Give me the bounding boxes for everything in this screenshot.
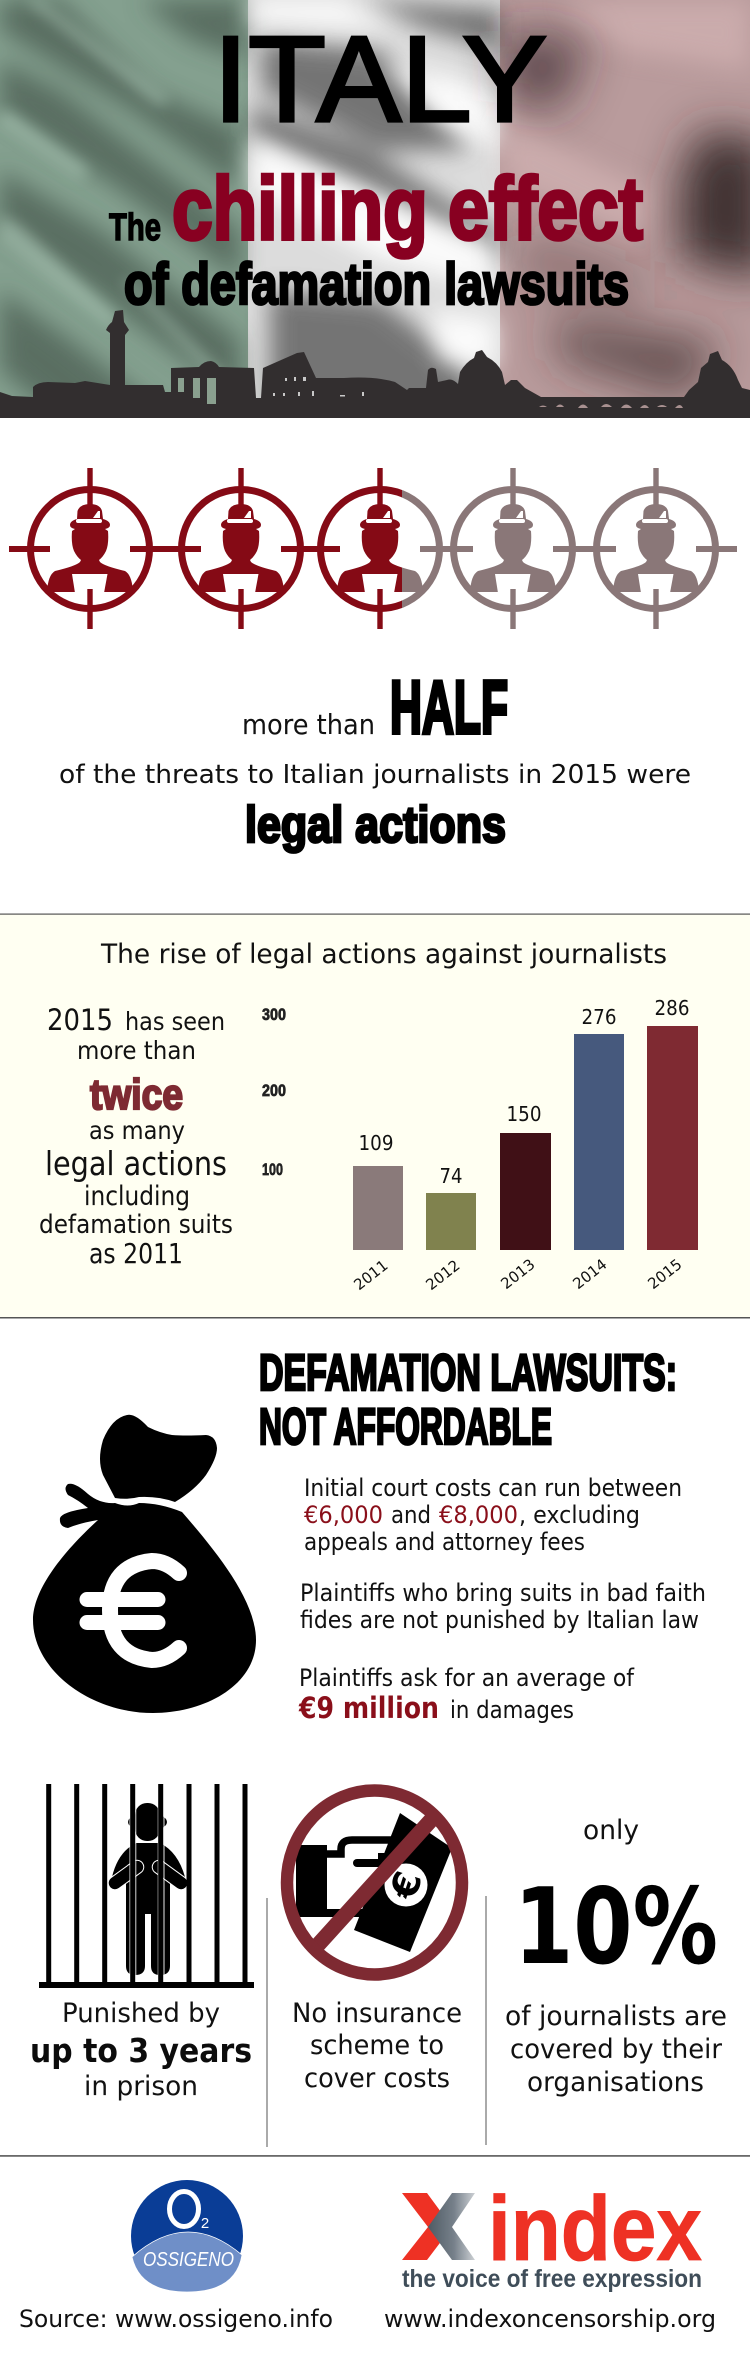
text: initial court costs: appeals and attorney fees: [304, 1528, 585, 1556]
hero banner: Italian flag with title and skyline: [0, 0, 750, 418]
text block: 2015 has seen more than twice: twice: [90, 1071, 183, 1119]
logo: Ossigeno: [131, 2180, 243, 2292]
bar 2012: 74: [440, 1164, 462, 1188]
text: initial court costs: [304, 1474, 682, 1556]
icon: target 4: [432, 468, 594, 629]
bar 2011: 2011: [350, 1256, 391, 1294]
icon: target 1: [9, 468, 171, 629]
text: nine million damages: Plaintiffs ask for an average of: [299, 1664, 634, 1692]
chart title: The rise of legal actions against journalists: [100, 939, 667, 970]
subtitle: chilling effect: chilling effect: [172, 158, 643, 258]
text: initial court costs: and: [391, 1501, 431, 1529]
statement: more than half: [59, 665, 691, 853]
bar 2012: 2012: [422, 1256, 463, 1294]
subtitle: of defamation lawsuits: of defamation lawsuits: [124, 252, 629, 317]
icon: target 5: [575, 468, 737, 629]
text: only 10 percent: organisations: [527, 2067, 704, 2098]
bar 2015: [644, 996, 698, 1293]
text: initial court costs: €8,000: [439, 1501, 518, 1529]
logo: Index on Censorship: the voice of free expression: [402, 2265, 702, 2293]
text: only 10 percent: [505, 1815, 727, 2098]
text: plaintiffs in bad faith: [300, 1579, 706, 1634]
text: no insurance scheme: No insurance: [292, 1998, 462, 2029]
text: nine million damages: €9 million: [298, 1691, 439, 1725]
bar 2012: [422, 1164, 476, 1294]
footer rule: [0, 2155, 750, 2157]
text: only 10 percent: only: [583, 1815, 639, 1846]
y axis labels: 100: [262, 1161, 283, 1179]
text block: 2015 has seen more than twice: has seen: [125, 1007, 225, 1036]
text: punished by up to 3 years: Punished by: [62, 1998, 220, 2029]
rome skyline silhouette: [0, 310, 750, 418]
bar 2011: 109: [358, 1131, 394, 1155]
title: ITALY: ITALY: [213, 11, 547, 147]
y axis labels: 200: [262, 1082, 286, 1100]
text block: 2015 has seen more than twice: as many: [89, 1116, 185, 1145]
skyline gaps: [178, 378, 216, 404]
logo: Ossigeno: 2: [201, 2215, 209, 2232]
text: no insurance scheme: scheme to: [310, 2030, 444, 2061]
text: nine million damages: [298, 1664, 634, 1725]
text: legal actions: legal actions: [245, 796, 506, 853]
text: plaintiffs in bad faith: Plaintiffs who bring suits in bad faith: [300, 1579, 706, 1607]
subtitle: The: The: [109, 207, 161, 249]
bar 2011: [350, 1131, 403, 1294]
text: no insurance scheme: cover costs: [304, 2063, 450, 2094]
text block: 2015 has seen more than twice: 2015: [47, 1003, 113, 1037]
text: more than: more than: [242, 708, 375, 741]
text block: 2015 has seen more than twice: including: [84, 1181, 190, 1212]
text: HALF: HALF: [390, 665, 508, 749]
bar 2013: [497, 1102, 551, 1293]
text: plaintiffs in bad faith: fides are not punished by Italian law: [300, 1606, 699, 1634]
logo: Index on Censorship: index: [488, 2178, 702, 2280]
threat targets: five journalists, 2.5 highlighted: [9, 468, 737, 629]
text: of the threats: of the threats to Italian journalists in 2015 were: [59, 760, 691, 790]
heading: defamation lawsuits not affordable: NOT AFFORDABLE: [259, 1398, 552, 1455]
bar 2013: 150: [506, 1102, 542, 1126]
text block: 2015 has seen more than twice: more than: [77, 1036, 196, 1065]
bar chart: [262, 996, 698, 1294]
text: no insurance scheme: [292, 1998, 462, 2094]
icon: target 2: [160, 468, 322, 629]
icon: euro money bag: [33, 1415, 256, 1713]
text block: 2015 has seen more than twice: defamation suits: [39, 1210, 233, 1240]
source link: index on censorship: www.indexoncensorship.org: [384, 2305, 716, 2333]
bar 2013: 2013: [497, 1255, 538, 1293]
text: punished by up to 3 years: up to 3 years: [30, 2031, 252, 2070]
y axis labels: [262, 1006, 286, 1179]
icon: prisoner behind bars: [39, 1784, 254, 1988]
divider: left: [266, 1898, 268, 2147]
text block: 2015 has seen more than twice: [39, 1003, 233, 1270]
bar 2014: 276: [582, 1005, 616, 1029]
text block: 2015 has seen more than twice: legal actions: [45, 1144, 227, 1183]
text: initial court costs: €6,000: [304, 1501, 383, 1529]
bar 2014: [569, 1005, 624, 1293]
euro on banknote: €: [382, 1866, 431, 1905]
y axis labels: 300: [262, 1006, 286, 1024]
text: punished by up to 3 years: in prison: [84, 2071, 198, 2102]
logo: Ossigeno: OSSIGENO: [143, 2249, 234, 2271]
icon: target 3 half red half grey: [317, 468, 443, 629]
bar 2015: 286: [654, 996, 690, 1020]
bar 2015: 2015: [644, 1255, 685, 1293]
flag background: [0, 0, 750, 418]
text: only 10 percent: covered by their: [510, 2034, 723, 2065]
text: only 10 percent: of journalists are: [505, 2001, 727, 2032]
cost text block: [298, 1474, 706, 1725]
text block: 2015 has seen more than twice: as 2011: [89, 1237, 183, 1270]
heading: defamation lawsuits not affordable: [259, 1344, 677, 1455]
text: punished by up to 3 years: [30, 1998, 252, 2102]
text: initial court costs: , excluding: [519, 1501, 640, 1529]
icon: no insurance sign: [287, 1790, 462, 1974]
text: initial court costs: Initial court costs can run between: [304, 1474, 682, 1502]
bar 2014: 2014: [569, 1255, 610, 1293]
logo: Index on Censorship: [402, 2178, 702, 2293]
source link: ossigeno: Source: www.ossigeno.info: [19, 2305, 333, 2333]
divider: right: [486, 1896, 487, 2145]
text: nine million damages: in damages: [450, 1696, 574, 1724]
panel: rise of legal actions: [0, 914, 750, 1318]
